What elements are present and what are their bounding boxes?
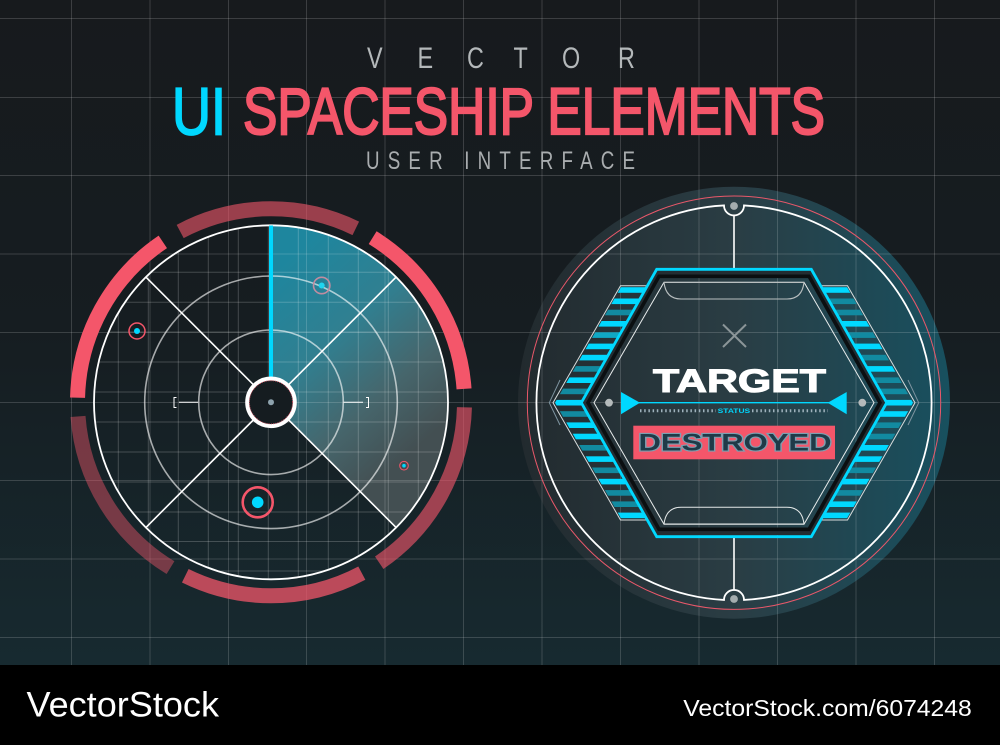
hexagon black frame	[588, 276, 880, 529]
radar target: right	[400, 461, 408, 470]
title line: spaceship elements: SPACESHIP ELEMENTS	[243, 74, 825, 148]
right disc backdrop	[518, 187, 950, 619]
radar target: top	[314, 277, 330, 294]
top node	[730, 202, 738, 269]
left side dot	[605, 399, 613, 407]
radar outer circle	[94, 225, 448, 579]
footer bar	[0, 665, 1000, 745]
heading: target: TARGET	[653, 363, 826, 399]
top tab	[664, 282, 804, 299]
white notched ring	[536, 205, 932, 600]
right side dot	[858, 399, 866, 407]
hexagon inner outline	[594, 282, 874, 524]
destroyed banner	[633, 426, 835, 459]
status divider	[621, 392, 847, 414]
right stripes	[823, 287, 913, 518]
radar sweep line	[269, 226, 273, 380]
title line: UI: UI	[172, 74, 226, 150]
left range bracket	[174, 398, 198, 408]
radar range rings	[145, 276, 397, 529]
left small chevron	[549, 380, 560, 425]
hexagon dark band	[585, 273, 883, 533]
title line: vector: VECTOR	[367, 41, 635, 75]
subtitle: USER INTERFACE	[366, 146, 635, 175]
panel: radar	[78, 209, 464, 596]
right range bracket	[344, 398, 368, 408]
pink ring	[527, 196, 941, 609]
hexagon cyan frame	[581, 269, 887, 537]
footer logo text: VectorStock	[26, 686, 220, 725]
radar inner grid	[90, 220, 450, 590]
title	[172, 41, 825, 175]
left stripes	[555, 287, 645, 518]
right small chevron	[908, 380, 919, 425]
radar sweep wedge	[271, 225, 448, 528]
radar hub	[247, 378, 295, 426]
status label: STATUS	[718, 408, 751, 415]
left chevron outline	[553, 286, 650, 520]
radar target: left	[129, 323, 145, 339]
footer image id: VectorStock.com/6074248	[683, 695, 972, 721]
right chevron outline	[818, 286, 915, 520]
bottom tab	[664, 507, 804, 524]
radar segmented outer ring	[78, 209, 464, 596]
radar crosshair lines	[146, 277, 396, 527]
bottom node	[730, 537, 738, 603]
panel: target destroyed	[527, 196, 941, 609]
destroyed banner: DESTROYED	[638, 430, 832, 457]
radar target: bottom	[243, 487, 273, 517]
cross icon	[723, 324, 746, 347]
